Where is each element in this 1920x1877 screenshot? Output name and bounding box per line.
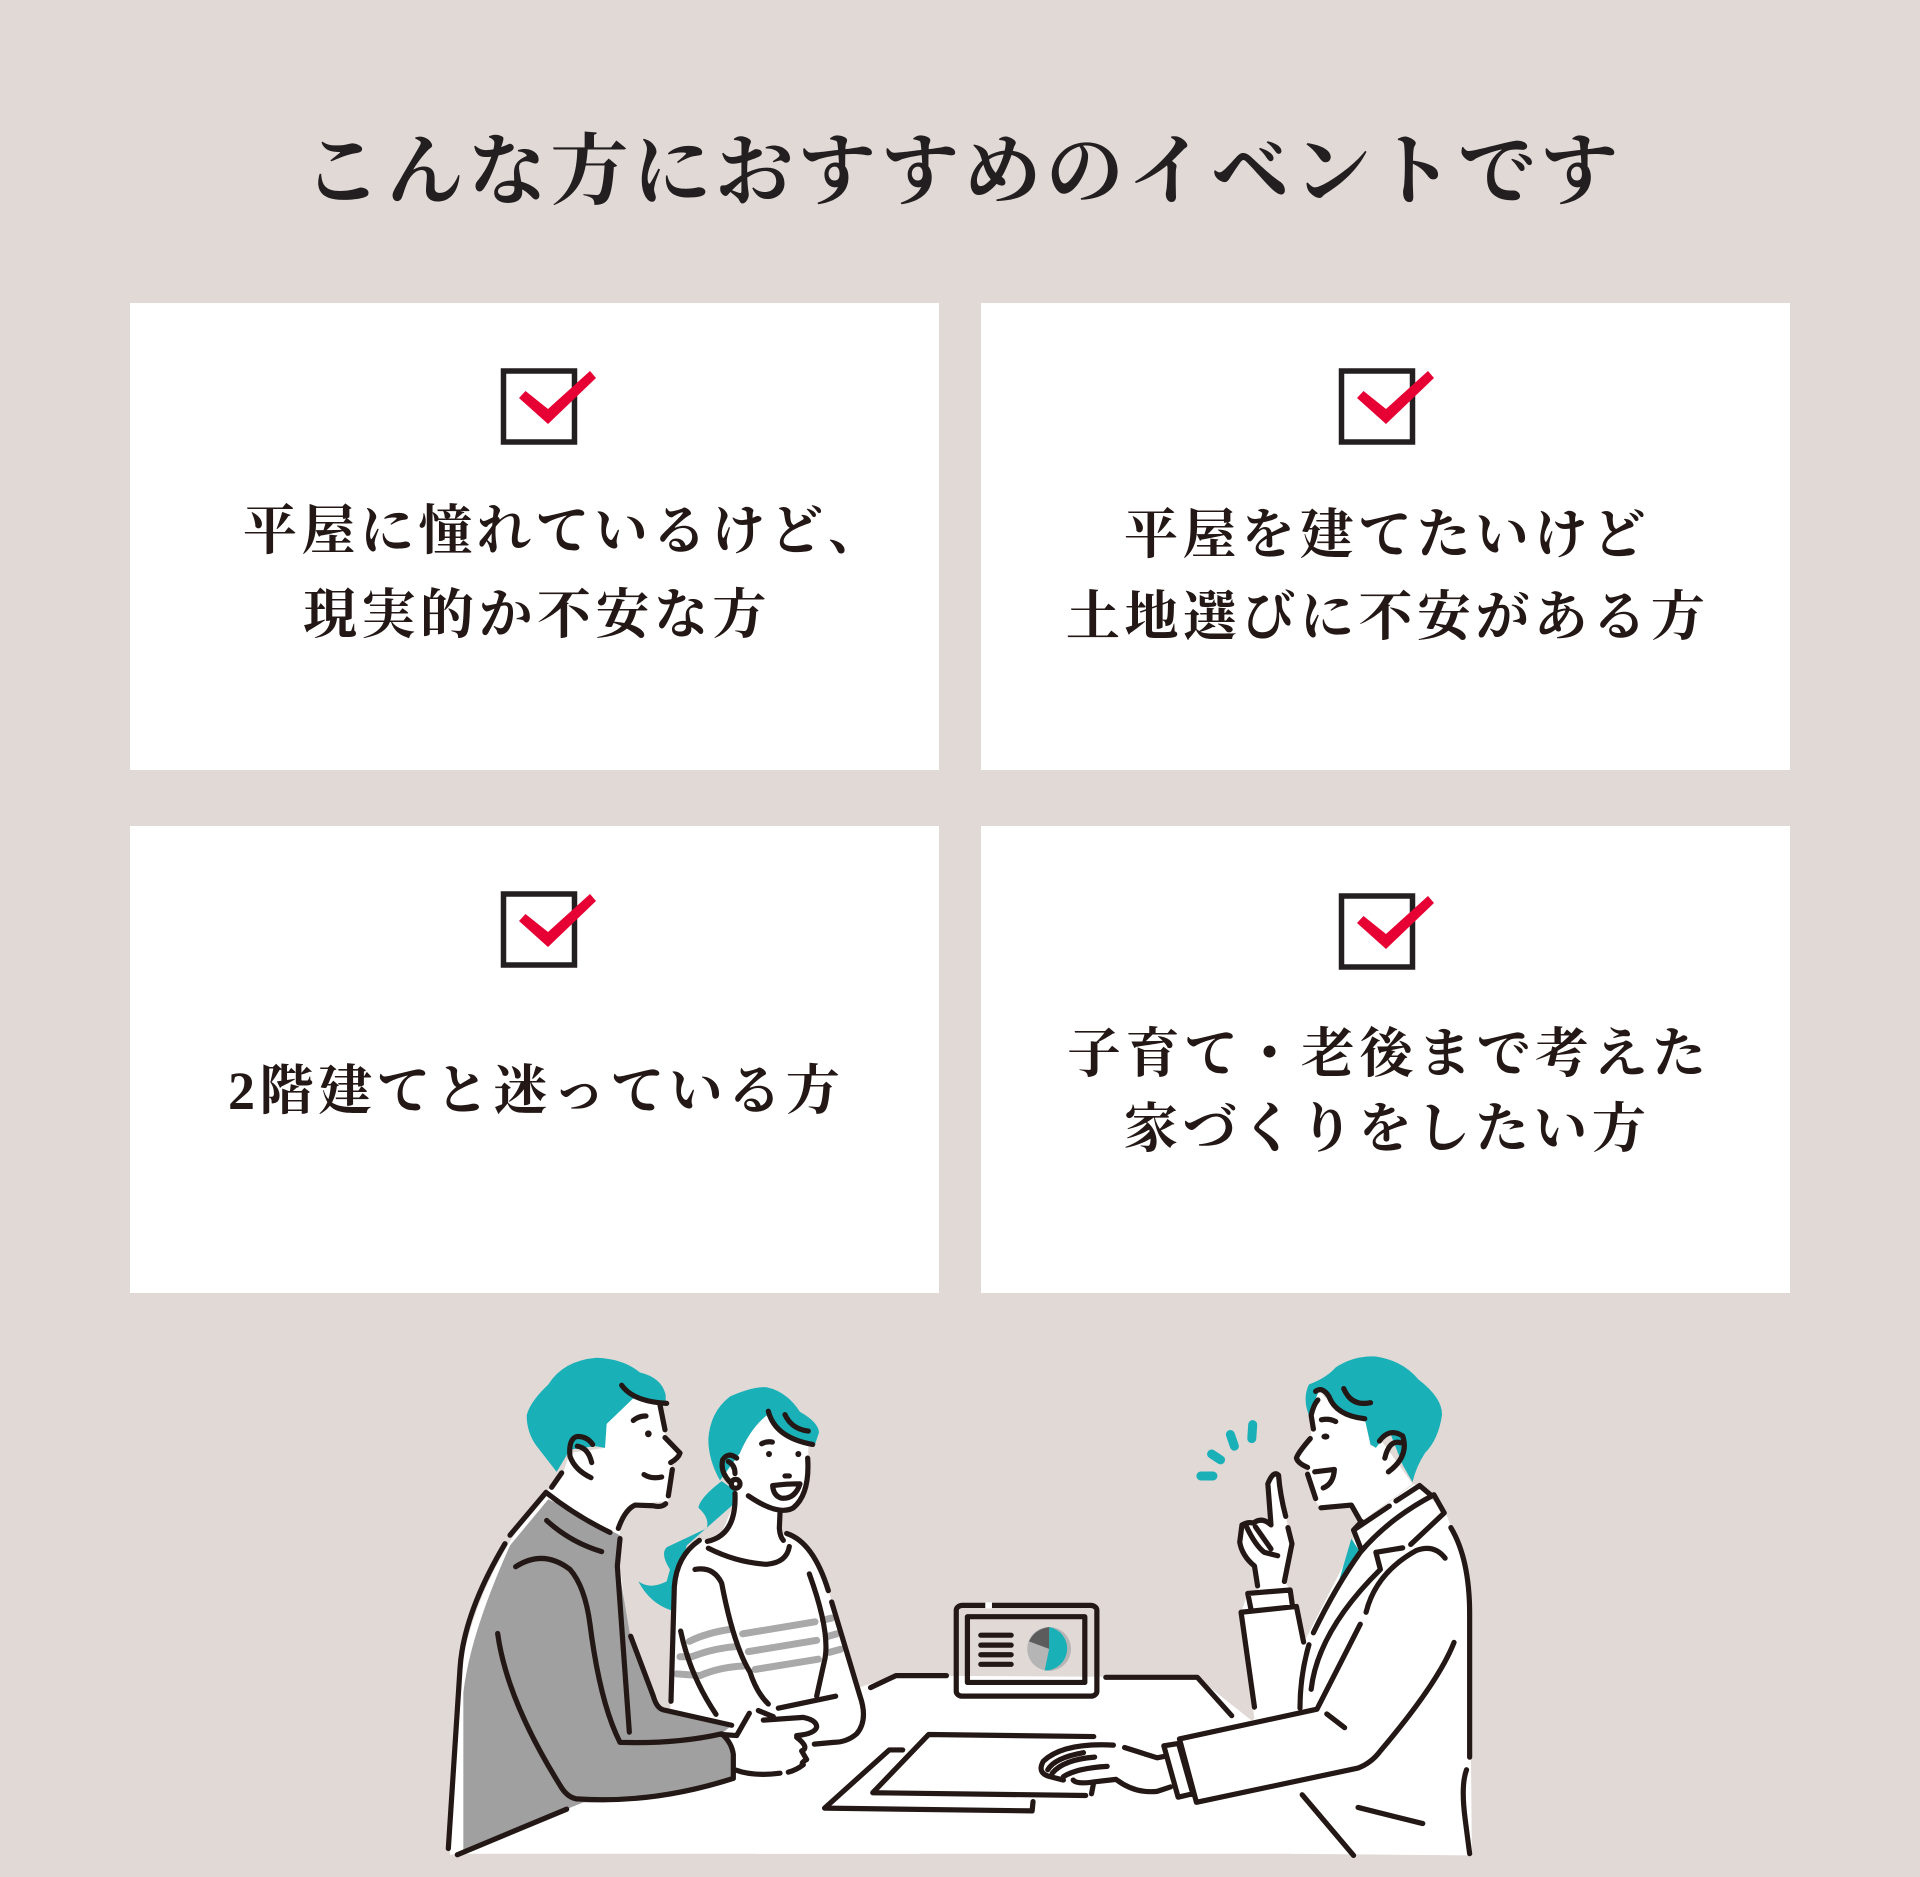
text: card 1 line 2: 現実的か不安な方 (303, 585, 771, 645)
panel: card 2 (981, 303, 1790, 770)
table top (755, 1676, 1300, 1854)
consultant outlines (1041, 1389, 1470, 1855)
table edges and papers (825, 1676, 1232, 1811)
text: card 1 line 1: 平屋に憧れているけど、 (243, 501, 886, 561)
woman body base (670, 1415, 865, 1744)
man white base (450, 1398, 817, 1855)
panel: card 1 (130, 303, 939, 770)
woman sweater stripes (677, 1618, 841, 1676)
woman ponytail (638, 1481, 735, 1611)
man outlines (448, 1385, 817, 1855)
couple (448, 1358, 920, 1855)
consultant body base (1251, 1484, 1472, 1855)
icon: checkbox 2 (1338, 368, 1434, 445)
teal speech marks (1201, 1425, 1253, 1476)
man eye (645, 1430, 652, 1437)
text: card 2 line 1: 平屋を建てたいけど (1124, 505, 1650, 565)
table base left (453, 1676, 920, 1854)
woman hair (708, 1387, 819, 1480)
man sweater (463, 1499, 735, 1851)
text: card 3: 2階建てと迷っている方 (228, 1061, 844, 1121)
text: card 2 line 2: 土地選びに不安がある方 (1066, 587, 1710, 647)
woman outlines (671, 1411, 863, 1744)
text: card 4 line 1: 子育て・老後まで考えた (1067, 1024, 1710, 1084)
text: card 4 line 2: 家づくりをしたい方 (1124, 1099, 1650, 1159)
icon: checkbox 3 (500, 891, 596, 968)
consultant tie (1339, 1539, 1360, 1580)
consultant face base (1298, 1388, 1413, 1522)
consultant arm base (1240, 1474, 1304, 1720)
man hair (527, 1358, 666, 1472)
tablet (956, 1605, 1097, 1696)
panel: card 3 (130, 826, 939, 1293)
icon: checkbox 1 (500, 368, 596, 445)
icon: checkbox 4 (1338, 893, 1434, 970)
title: こんな方におすすめのイベントです (303, 128, 1623, 215)
consultant hair (1306, 1356, 1442, 1482)
tablet and consultant (825, 1356, 1472, 1855)
woman eyes (766, 1451, 801, 1457)
panel: card 4 (981, 826, 1790, 1293)
consultant eye (1321, 1433, 1329, 1440)
